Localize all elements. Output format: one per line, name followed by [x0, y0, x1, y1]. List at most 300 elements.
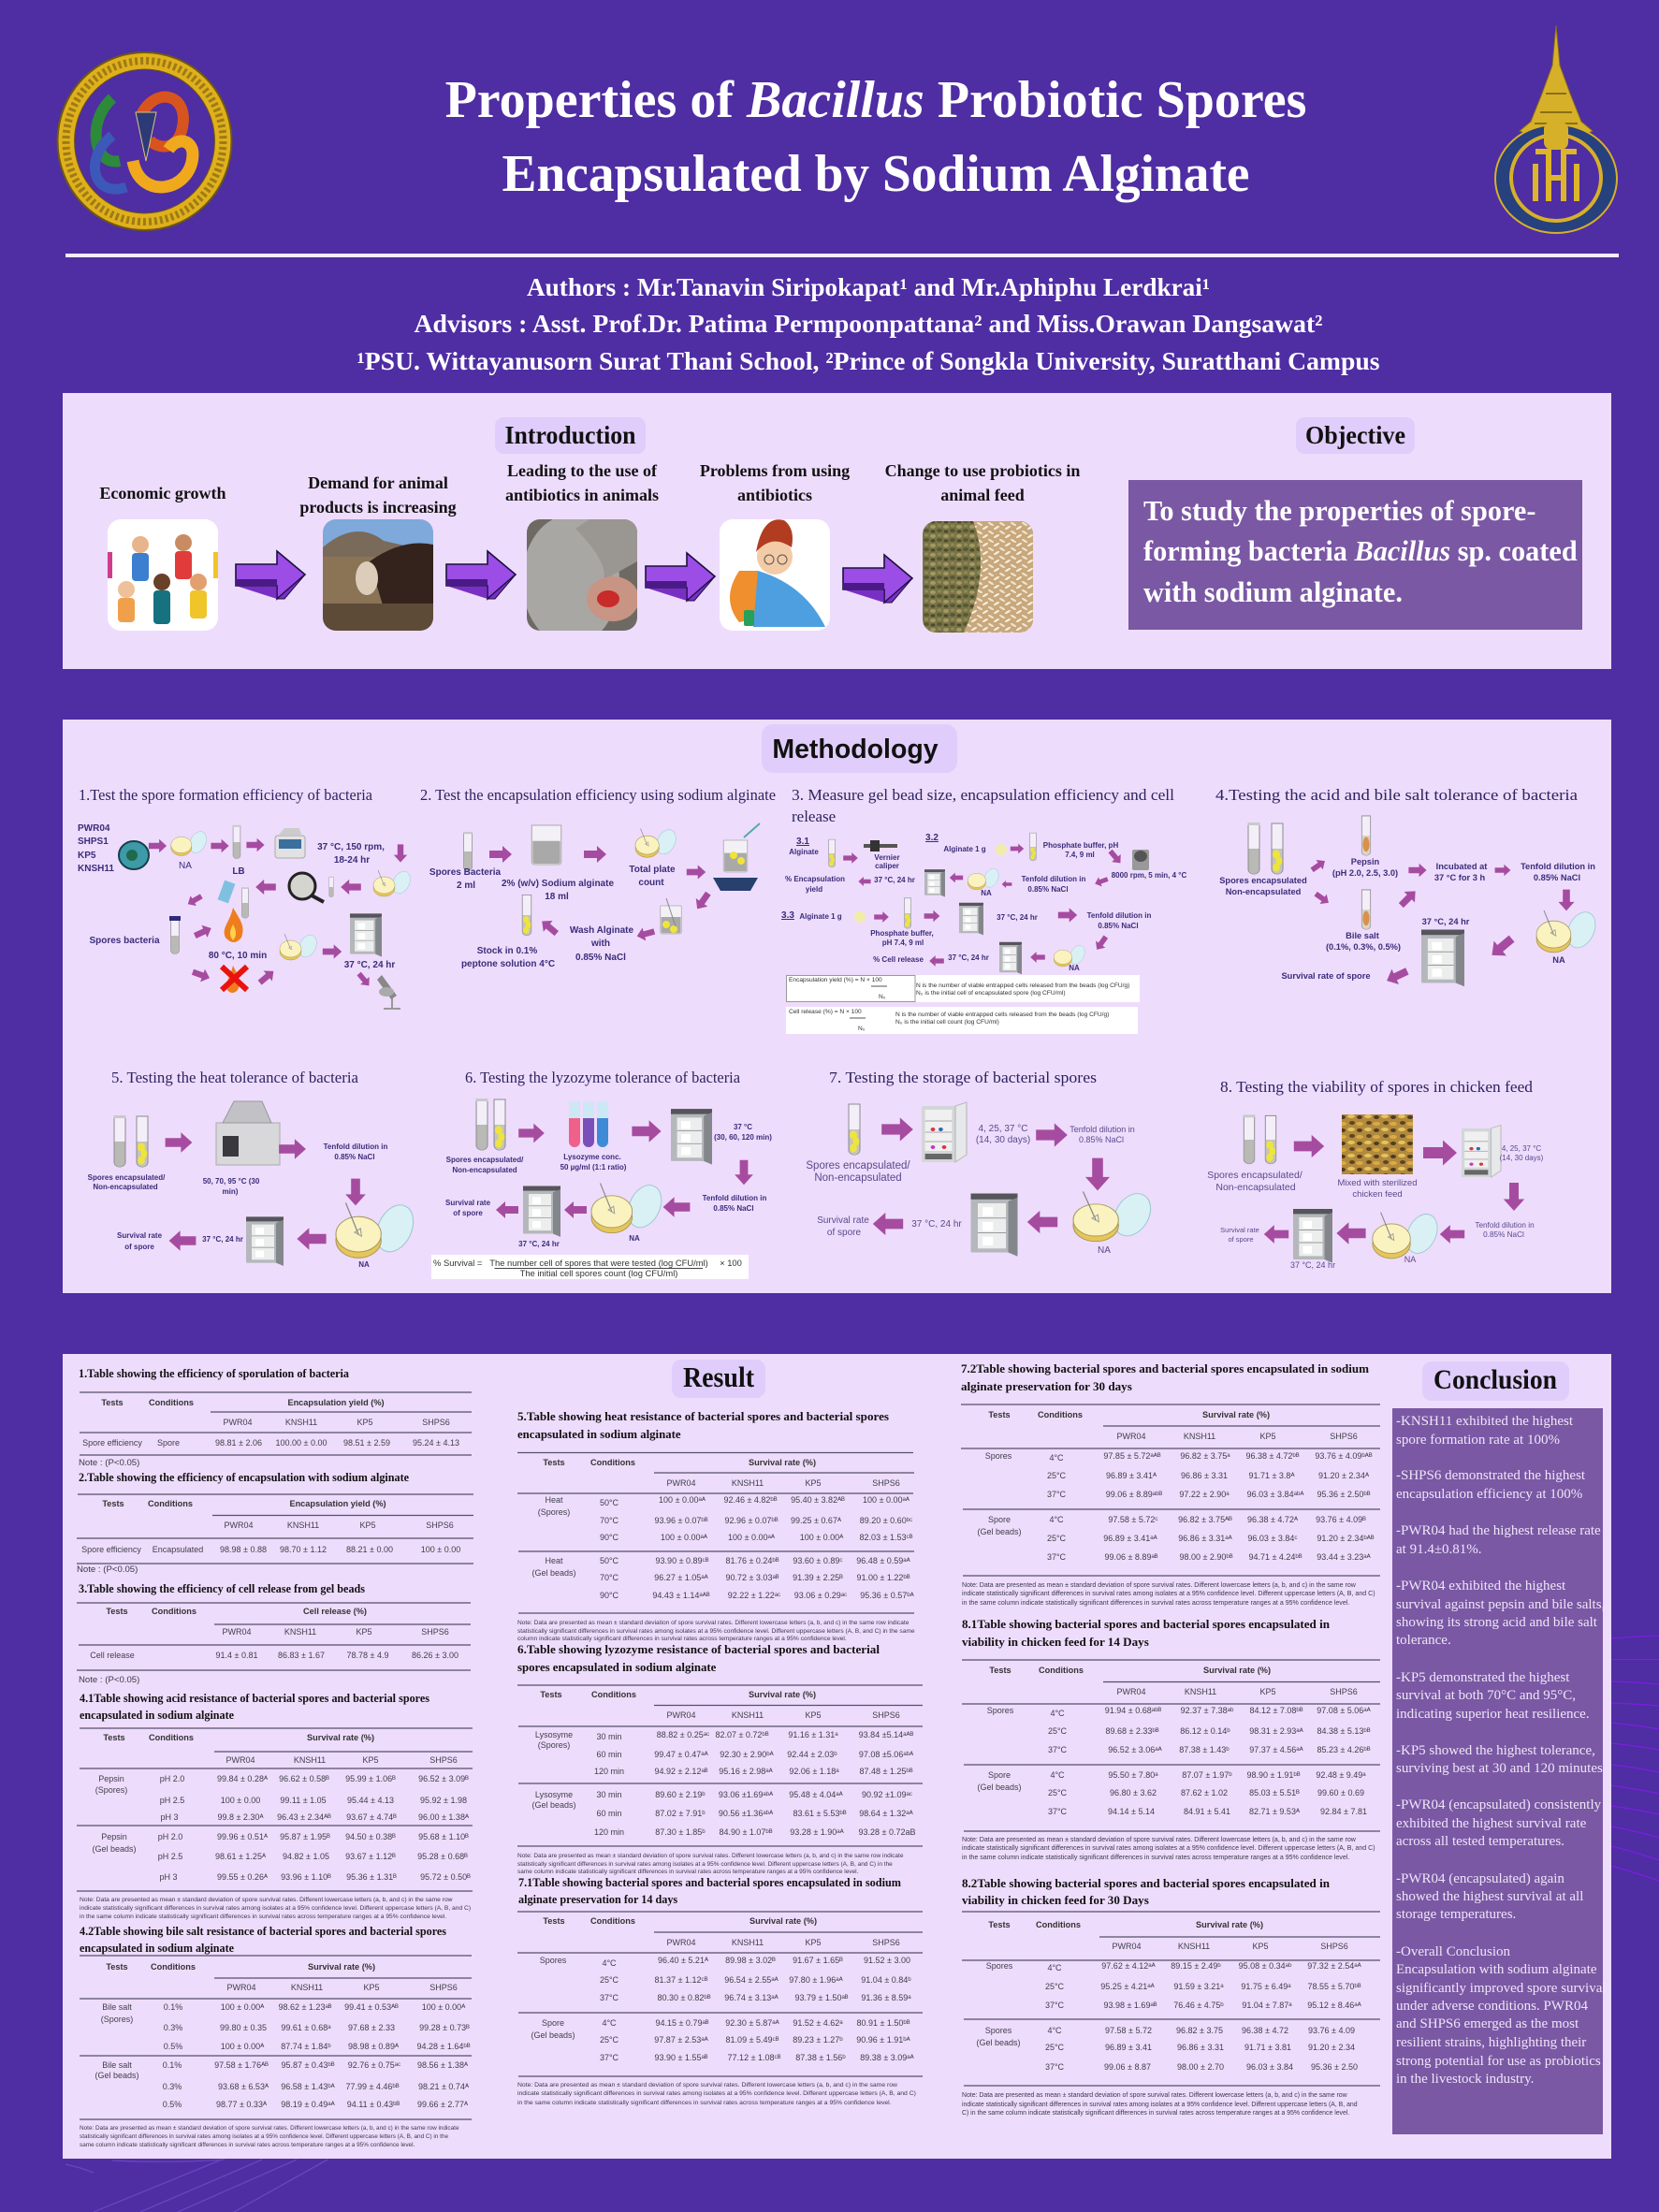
- table 8.1: chicken feed 14 days: 25°C: [1048, 1788, 1068, 1797]
- table 7.2: preservation 30 days: 96.86 ± 3.31: [1181, 1471, 1228, 1480]
- table 4.2: bile salt resistance: 0.1%: [163, 2060, 182, 2070]
- table 7.2: preservation 30 days: 93.44 ± 3.23ᵃᴬ: [1317, 1552, 1372, 1562]
- conclusion box: -PWR04 (encapsulated) consistently: [1396, 1797, 1602, 1812]
- table 5: heat resistance: (Spores): [538, 1507, 570, 1517]
- table 3: cell release: 86.83 ± 1.67: [278, 1651, 325, 1660]
- table 4.1: acid resistance: (Gel beads): [92, 1844, 137, 1854]
- diagram 8: viability in chicken feed: 0.85% NaCl: [1483, 1230, 1524, 1239]
- table 6: lysozyme resistance: PWR04: [666, 1710, 696, 1720]
- conclusion box: under adverse conditions. PWR04: [1396, 1999, 1588, 2014]
- table 4.2: bile salt resistance: 98.56 ± 1.38ᴬ: [417, 2060, 469, 2070]
- table 4.1: acid resistance: 95.28 ± 0.68ᴮ: [417, 1852, 468, 1861]
- table 4.2: bile salt resistance: encapsulated in sodium alginate: [80, 1942, 235, 1955]
- diagram 4: acid and bile salt: Non-encapsulated: [1226, 887, 1302, 896]
- table 4.2: bile salt resistance: 98.77 ± 0.33ᴬ: [216, 2100, 268, 2109]
- diagram 6: lysozyme tolerance: Spores encapsulated/: [446, 1156, 524, 1164]
- table 4.1: acid resistance: 95.72 ± 0.50ᴮ: [420, 1872, 471, 1882]
- diagram 3: gel bead size, encapsulation yield, cell release: 37 °C, 24 hr: [948, 953, 989, 962]
- table 7.1: preservation 14 days: SHPS6: [872, 1938, 900, 1947]
- diagram 1: spore formation: 18-24 hr: [334, 855, 370, 866]
- table 7.2: preservation 30 days: 4°C: [1049, 1453, 1064, 1463]
- table 6: lysozyme resistance: KNSH11: [732, 1710, 764, 1720]
- table 4.1: acid resistance: pH 2.5: [158, 1852, 182, 1861]
- diagram 3: gel bead size, encapsulation yield, cell release: 8000 rpm, 5 min, 4 °C: [1112, 871, 1186, 880]
- table 3: cell release: 86.26 ± 3.00: [412, 1651, 458, 1660]
- table 7.1: preservation 14 days: 96.54 ± 2.55ᵃᴬ: [724, 1975, 779, 1985]
- table 3: cell release: Cell release: [90, 1651, 135, 1660]
- table 4.1: acid resistance: Conditions: [149, 1733, 194, 1742]
- table 8.1: chicken feed 14 days: 95.50 ± 7.80ᵃ: [1108, 1770, 1158, 1780]
- table 7.2: preservation 30 days: 96.82 ± 3.75ᴬᴮ: [1178, 1515, 1232, 1524]
- table 7.2: preservation 30 days: KP5: [1259, 1432, 1276, 1441]
- table 6: lysozyme resistance: (Spores): [538, 1740, 570, 1750]
- table 8.2: chicken feed 30 days: 95.12 ± 8.46ᵃᴬ: [1307, 2001, 1362, 2010]
- table 6: lysozyme resistance: 88.82 ± 0.25ᵃᶜ: [657, 1730, 709, 1739]
- objective box: To study the properties of spore-: [1143, 495, 1535, 527]
- diagram 8: viability in chicken feed: NA: [1404, 1255, 1416, 1264]
- table 7.2: preservation 30 days: Note: Data are presented as mean ± standard deviation of spore survival rates. Different lowercase letters (a, b, and c) in the same row: [962, 1582, 1357, 1589]
- table 4.2: bile salt resistance: 100 ± 0.00ᴬ: [221, 2042, 265, 2051]
- diagram 3: gel bead size, encapsulation yield, cell release: % Cell release: [873, 955, 924, 964]
- table 7.1: preservation 14 days: 91.36 ± 8.59ᵃ: [861, 1993, 911, 2002]
- table 8.2: chicken feed 30 days: Tests: [988, 1920, 1011, 1929]
- table 8.1: chicken feed 14 days: 84.91 ± 5.41: [1184, 1807, 1230, 1816]
- table 8.2: chicken feed 30 days: 91.75 ± 6.49ᵃ: [1241, 1982, 1291, 1991]
- formula: percent survival: [431, 1255, 749, 1279]
- authors: [357, 273, 1379, 375]
- diagram 4: acid and bile salt: Incubated at: [1436, 862, 1487, 871]
- table 2: encapsulation: 2.Table showing the efficiency of encapsulation with sodium alginate: [79, 1471, 409, 1484]
- table 4.1: acid resistance: 4.1Table showing acid resistance of bacterial spores and bacterial spores: [80, 1692, 429, 1705]
- table 7.1: preservation 14 days: 97.80 ± 1.96ᵃᴬ: [789, 1975, 844, 1985]
- table 7.2: preservation 30 days: 37°C: [1047, 1552, 1067, 1562]
- diagram 3: gel bead size, encapsulation yield, cell release: Vernier: [874, 853, 900, 862]
- table 4.1: acid resistance: 99.55 ± 0.26ᴬ: [217, 1872, 269, 1882]
- image: people: [108, 519, 218, 631]
- table 4.2: bile salt resistance: 0.5%: [164, 2042, 182, 2051]
- diagram 1: spore formation: LB: [232, 866, 245, 877]
- table 8.1: chicken feed 14 days: (Gel beads): [977, 1783, 1022, 1792]
- method headings: [79, 786, 1578, 1096]
- table 7.1: preservation 14 days: Spores: [540, 1956, 567, 1965]
- table 5: heat resistance: KP5: [805, 1478, 822, 1488]
- diagram 3: gel bead size, encapsulation yield, cell release: caliper: [875, 862, 899, 870]
- diagram 1: spore formation: SHPS1: [78, 837, 109, 847]
- diagram 4: acid and bile salt: [1219, 816, 1601, 988]
- method headings: 6. Testing the lyzozyme tolerance of bacteria: [465, 1069, 740, 1086]
- table 8.2: chicken feed 30 days: viability in chicken feed for 30 Days: [962, 1893, 1149, 1907]
- table 8.1: chicken feed 14 days: 4°C: [1050, 1709, 1065, 1718]
- table 4.2: bile salt resistance: 99.61 ± 0.68ᵃ: [281, 2023, 331, 2032]
- table 4.2: bile salt resistance: 0.1%: [164, 2002, 182, 2012]
- table 5: heat resistance: column indicate statistically significant differences in survival rates across temperature ranges at a 95% confidence level.: [517, 1636, 847, 1642]
- image: sheep wound: [527, 519, 637, 631]
- step labels: [99, 461, 1080, 517]
- conclusion box: Encapsulation with sodium alginate: [1396, 1962, 1597, 1977]
- table 4.1: acid resistance: Pepsin: [101, 1832, 127, 1841]
- diagram 5: heat tolerance: 0.85% NaCl: [334, 1153, 375, 1161]
- table 8.1: chicken feed 14 days: 85.23 ± 4.26ᵇᴮ: [1317, 1745, 1371, 1754]
- formula: cell release: N is the number of viable entrapped cells released from the beads (log CFU/g): [895, 1011, 1109, 1018]
- table 4.2: bile salt resistance: Survival rate (%): [308, 1962, 375, 1972]
- diagram 3: gel bead size, encapsulation yield, cell release: yield: [806, 885, 822, 894]
- table 7.2: preservation 30 days: KNSH11: [1184, 1432, 1215, 1441]
- table 5: heat resistance: 50°C: [600, 1556, 619, 1565]
- table 5: heat resistance: 70°C: [600, 1573, 619, 1582]
- conclusion box: across all tested temperatures.: [1396, 1834, 1564, 1849]
- table 7.1: preservation 14 days: Conditions: [590, 1916, 635, 1926]
- conclusion box: -Overall Conclusion: [1396, 1944, 1511, 1959]
- diagram 2: encapsulation: Stock in 0.1%: [477, 946, 537, 956]
- table 7.2: preservation 30 days: 93.76 ± 4.09ᵇᴬᴮ: [1315, 1451, 1373, 1461]
- table 6: lysozyme resistance: Conditions: [591, 1690, 636, 1699]
- table 6: lysozyme resistance: 95.48 ± 4.04ᵃᴬ: [789, 1790, 844, 1799]
- table 6: lysozyme resistance: 30 min: [596, 1790, 622, 1799]
- table 6: lysozyme resistance: 30 min: [596, 1732, 622, 1741]
- table 1: sporulation: Spore: [157, 1438, 180, 1448]
- table 4.2: bile salt resistance: KP5: [363, 1983, 380, 1992]
- table 2: encapsulation: 100 ± 0.00: [421, 1545, 460, 1554]
- table 7.1: preservation 14 days: 37°C: [600, 2053, 619, 2062]
- table 8.2: chicken feed 30 days: KNSH11: [1178, 1942, 1210, 1951]
- heading: objective: [1296, 417, 1415, 454]
- conclusion box: surviving best at 30 and 120 minutes.: [1396, 1761, 1607, 1776]
- formula: percent survival: % Survival =: [433, 1258, 483, 1268]
- diagram 8: viability in chicken feed: of spore: [1228, 1235, 1254, 1244]
- diagram 3: gel bead size, encapsulation yield, cell release: 3.1: [796, 837, 809, 847]
- diagram 3: gel bead size, encapsulation yield, cell release: 7.4, 9 ml: [1065, 851, 1095, 859]
- diagram 5: heat tolerance: 37 °C, 24 hr: [202, 1235, 243, 1244]
- table 7.1: preservation 14 days: Survival rate (%): [749, 1916, 817, 1926]
- logo: school seal: [58, 52, 232, 230]
- table 4.2: bile salt resistance: 100 ± 0.00ᴬ: [422, 2002, 466, 2012]
- table 8.1: chicken feed 14 days: Spores: [987, 1706, 1014, 1715]
- table 4.1: acid resistance: 96.62 ± 0.58ᴮ: [279, 1774, 329, 1783]
- method headings: release: [792, 808, 836, 825]
- conclusion box: -PWR04 (encapsulated) again: [1396, 1871, 1564, 1886]
- table 5: heat resistance: 95.40 ± 3.82ᴬᴮ: [791, 1495, 845, 1505]
- diagram 2: encapsulation: 0.85% NaCl: [575, 953, 626, 963]
- table 7.2: preservation 30 days: 97.22 ± 2.90ᵃ: [1179, 1490, 1230, 1499]
- table 1: sporulation: 95.24 ± 4.13: [413, 1438, 459, 1448]
- table 4.1: acid resistance: 99.11 ± 1.05: [280, 1796, 327, 1805]
- diagram 3: gel bead size, encapsulation yield, cell release: 37 °C, 24 hr: [997, 913, 1038, 922]
- table 4.2: bile salt resistance: 98.98 ± 0.89ᴬ: [348, 2042, 400, 2051]
- table 8.2: chicken feed 30 days: 99.06 ± 8.87: [1104, 2062, 1151, 2072]
- table 4.1: acid resistance: Note: Data are presented as mean ± standard deviation of spore survival rates. Different lowercase letters (a, b, and c) in the same row: [80, 1897, 453, 1903]
- formula: encapsulation yield: N is the number of viable entrapped cells released from the beads (log CFU/g): [916, 982, 1129, 989]
- diagram 1: spore formation: 80 °C, 10 min: [209, 951, 267, 961]
- table 6: lysozyme resistance: 91.16 ± 1.31ᵃ: [788, 1730, 838, 1739]
- table 8.2: chicken feed 30 days: 4°C: [1047, 2026, 1062, 2035]
- table 3: cell release: 91.4 ± 0.81: [216, 1651, 257, 1660]
- table 7.2: preservation 30 days: Spores: [985, 1451, 1012, 1461]
- table 8.1: chicken feed 14 days: 82.71 ± 9.53ᴬ: [1249, 1807, 1301, 1816]
- table 5: heat resistance: 90°C: [600, 1533, 619, 1542]
- table 5: heat resistance: Heat: [545, 1556, 563, 1565]
- table 8.1: chicken feed 14 days: 84.38 ± 5.13ᵇᴮ: [1317, 1726, 1371, 1736]
- title: [445, 71, 1306, 203]
- table 3: cell release: 3.Table showing the efficiency of cell release from gel beads: [79, 1582, 365, 1595]
- table 6: lysozyme resistance: same column indicate statistically significant differences in survival rates across temperature ranges at a 95% confidence level.: [517, 1869, 859, 1875]
- table 6: lysozyme resistance: 98.64 ± 1.32ᵃᴬ: [859, 1809, 914, 1818]
- diagram 3: gel bead size, encapsulation yield, cell release: 3.3: [781, 910, 794, 921]
- table 8.1: chicken feed 14 days: 86.12 ± 0.14ᵇ: [1180, 1726, 1230, 1736]
- table 4.1: acid resistance: 98.61 ± 1.25ᴬ: [215, 1852, 267, 1861]
- table 8.2: chicken feed 30 days: 97.32 ± 2.54ᵃᴬ: [1307, 1961, 1362, 1971]
- table 5: heat resistance: 99.25 ± 0.67ᴬ: [791, 1516, 842, 1525]
- table 8.2: chicken feed 30 days: SHPS6: [1320, 1942, 1348, 1951]
- panel: methodology: [63, 720, 1611, 1293]
- table 7.1: preservation 14 days: 91.52 ± 4.62ᵃ: [793, 2018, 843, 2028]
- table 7.1: preservation 14 days: Note: Data are presented as mean ± standard deviation of spore survival rates. Different lowercase letters (a, b, and c) in the same row: [517, 2082, 897, 2088]
- table 4.1: acid resistance: 99.84 ± 0.28ᴬ: [217, 1774, 269, 1783]
- table 4.2: bile salt resistance: PWR04: [226, 1983, 256, 1992]
- table 4.1: acid resistance: indicate statistically significant differences in survival rates among isolates at a 95% confidence level. Different uppercase letters (A, B, and C): [80, 1905, 471, 1912]
- diagram 2: encapsulation: Spores Bacteria: [429, 867, 502, 878]
- conclusion box: -KP5 showed the highest tolerance,: [1396, 1743, 1595, 1758]
- table 8.2: chicken feed 30 days: 91.04 ± 7.87ᵃ: [1242, 2001, 1292, 2010]
- table 5: heat resistance: 100 ± 0.00ᵃᴬ: [863, 1495, 910, 1505]
- conclusion box: indicating superior heat resilience.: [1396, 1707, 1590, 1722]
- formula: cell release: [786, 1007, 1138, 1034]
- table 2: encapsulation: Tests: [102, 1499, 124, 1508]
- table 7.1: preservation 14 days: alginate preservation for 14 days: [518, 1893, 677, 1906]
- table 5: heat resistance: 93.96 ± 0.07ᵇᴮ: [654, 1516, 708, 1525]
- table 2: encapsulation: Conditions: [148, 1499, 193, 1508]
- table 4.2: bile salt resistance: 0.3%: [164, 2023, 182, 2032]
- table 8.2: chicken feed 30 days: 91.71 ± 3.81: [1244, 2043, 1291, 2052]
- diagram 7: storage: Tenfold dilution in: [1070, 1125, 1135, 1134]
- table 4.2: bile salt resistance: Bile salt: [102, 2002, 132, 2012]
- method headings: 2. Test the encapsulation efficiency using sodium alginate: [420, 786, 776, 804]
- table 3: cell release: Cell release (%): [303, 1607, 367, 1616]
- diagram 5: heat tolerance: [88, 1101, 420, 1269]
- table 5: heat resistance: 100 ± 0.00ᵃᴬ: [728, 1533, 776, 1542]
- table 8.1: chicken feed 14 days: 91.94 ± 0.68ᵃᵇᴮ: [1105, 1706, 1161, 1715]
- table 4.2: bile salt resistance: 99.28 ± 0.73ᴮ: [419, 2023, 470, 2032]
- table 4.2: bile salt resistance: 100 ± 0.00ᴬ: [221, 2002, 265, 2012]
- divider: [65, 254, 1619, 257]
- table 4.1: acid resistance: KNSH11: [294, 1755, 326, 1765]
- table 5: heat resistance: Tests: [543, 1458, 565, 1467]
- table 8.2: chicken feed 30 days: 76.46 ± 4.75ᵇ: [1173, 2001, 1224, 2010]
- table 5: heat resistance: 90°C: [600, 1591, 619, 1600]
- method headings: 1.Test the spore formation efficiency of bacteria: [79, 786, 372, 804]
- table 6: lysozyme resistance: statistically significant differences in survival rates among isolates at a 95% confidence level. Different uppercase letters (A, B, and C) in the: [517, 1861, 893, 1868]
- table 6: lysozyme resistance: 95.16 ± 2.98ᵃᴬ: [719, 1767, 774, 1776]
- table 7.1: preservation 14 days: 89.23 ± 1.27ᵇ: [793, 2035, 843, 2045]
- table 2: encapsulation: Encapsulation yield (%): [289, 1499, 386, 1508]
- table 7.2: preservation 30 days: alginate preservation for 30 days: [961, 1379, 1132, 1393]
- conclusion box: showed the highest survival at all: [1396, 1889, 1583, 1904]
- conclusion box: spore formation rate at 100%: [1396, 1433, 1560, 1448]
- table 8.2: chicken feed 30 days: 97.62 ± 4.12ᵃᴬ: [1101, 1961, 1157, 1971]
- table 7.1: preservation 14 days: 77.12 ± 1.08ᶜᴮ: [728, 2053, 781, 2062]
- diagram 4: acid and bile salt: NA: [1552, 955, 1565, 965]
- table 8.1: chicken feed 14 days: Survival rate (%): [1203, 1666, 1271, 1675]
- table 4.2: bile salt resistance: Note: Data are presented as mean ± standard deviation of spore survival rates. Different lowercase letters (a, b, and c) in the same row indicate: [80, 2125, 459, 2132]
- table 4.1: acid resistance: 93.96 ± 1.10ᴮ: [281, 1872, 331, 1882]
- diagram 5: heat tolerance: Survival rate: [117, 1231, 163, 1240]
- table 7.2: preservation 30 days: 96.38 ± 4.72ᴬ: [1247, 1515, 1299, 1524]
- heading: methodology: [762, 724, 957, 773]
- conclusion box: -KP5 demonstrated the highest: [1396, 1670, 1570, 1685]
- diagram 6: lysozyme tolerance: 37 °C, 24 hr: [518, 1240, 560, 1248]
- table 2: encapsulation: PWR04: [224, 1521, 254, 1530]
- table 6: lysozyme resistance: 99.47 ± 0.47ᵃᴬ: [654, 1750, 709, 1759]
- table 7.1: preservation 14 days: KP5: [805, 1938, 822, 1947]
- table 4.1: acid resistance: pH 2.5: [160, 1796, 184, 1805]
- diagram 8: viability in chicken feed: [1207, 1114, 1544, 1270]
- image: animal feed grains: [923, 521, 1033, 633]
- diagram 8: viability in chicken feed: 4, 25, 37 °C: [1502, 1144, 1541, 1153]
- conclusion box: significantly improved spore survival: [1396, 1981, 1607, 1996]
- table 5: heat resistance: Conditions: [590, 1458, 635, 1467]
- diagram 5: heat tolerance: of spore: [124, 1243, 154, 1251]
- table 8.1: chicken feed 14 days: 84.12 ± 7.08ᵇᴮ: [1249, 1706, 1303, 1715]
- table 4.1: acid resistance: 93.67 ± 1.12ᴮ: [345, 1852, 396, 1861]
- diagram 8: viability in chicken feed: 37 °C, 24 hr: [1290, 1260, 1335, 1270]
- diagram 7: storage: 4, 25, 37 °C: [979, 1124, 1027, 1134]
- table 7.1: preservation 14 days: 96.40 ± 5.21ᴬ: [658, 1956, 709, 1965]
- table 7.2: preservation 30 days: in the same column indicate statistically significant differences in survival rates across temperature ranges at a 95% confidence level.: [962, 1600, 1349, 1607]
- table 6: lysozyme resistance: Lysosyme: [535, 1790, 573, 1799]
- table 4.1: acid resistance: pH 2.0: [160, 1774, 184, 1783]
- table 6: lysozyme resistance: 93.84 ±5.14ᵃᴬᴮ: [859, 1730, 914, 1739]
- table 4.1: acid resistance: 99.8 ± 2.30ᴬ: [217, 1812, 264, 1822]
- objective box: [1128, 480, 1582, 630]
- diagram 4: acid and bile salt: 0.85% NaCl: [1534, 873, 1580, 882]
- conclusion box: -PWR04 had the highest release rate: [1396, 1523, 1601, 1538]
- table 6: lysozyme resistance: 93.28 ± 0.72aB: [859, 1827, 915, 1837]
- step labels: Change to use probiotics in: [885, 461, 1080, 480]
- table 6: lysozyme resistance: 120 min: [594, 1827, 624, 1837]
- table 3: cell release: PWR04: [222, 1627, 252, 1637]
- table 7.2: preservation 30 days: (Gel beads): [977, 1527, 1022, 1536]
- table 7.1: preservation 14 days: 87.38 ± 1.56ᵇ: [795, 2053, 846, 2062]
- table 4.1: acid resistance: [77, 1692, 473, 1920]
- table 4.1: acid resistance: PWR04: [226, 1755, 255, 1765]
- table 8.2: chicken feed 30 days: 95.36 ± 2.50: [1311, 2062, 1358, 2072]
- diagram 5: heat tolerance: Spores encapsulated/: [88, 1173, 166, 1182]
- diagram 4: acid and bile salt: (pH 2.0, 2.5, 3.0): [1332, 868, 1398, 878]
- table 8.1: chicken feed 14 days: 97.08 ± 5.06ᵃᴬ: [1317, 1706, 1372, 1715]
- authors: Advisors : Asst. Prof.Dr. Patima Permpoonpattana² and Miss.Orawan Dangsawat²: [414, 310, 1323, 338]
- table 7.2: preservation 30 days: 25°C: [1047, 1471, 1067, 1480]
- table 7.2: preservation 30 days: 96.89 ± 3.41ᵃᴬ: [1103, 1534, 1158, 1543]
- diagram 2: encapsulation: 2% (w/v) Sodium alginate: [502, 879, 614, 889]
- table 4.2: bile salt resistance: Bile salt: [102, 2060, 132, 2070]
- diagram 1: spore formation: NA: [179, 861, 192, 871]
- table 1: sporulation: 98.51 ± 2.59: [343, 1438, 390, 1448]
- diagram 1: spore formation: 37 °C, 150 rpm,: [317, 842, 385, 852]
- table 6: lysozyme resistance: KP5: [805, 1710, 822, 1720]
- table 8.2: chicken feed 30 days: 4°C: [1047, 1963, 1062, 1972]
- diagram 6: lysozyme tolerance: Tenfold dilution in: [703, 1194, 766, 1202]
- table 5: heat resistance: 100 ± 0.00ᵃᴬ: [659, 1495, 706, 1505]
- table 6: lysozyme resistance: SHPS6: [872, 1710, 900, 1720]
- table 8.1: chicken feed 14 days: Tests: [989, 1666, 1011, 1675]
- formula: cell release: N₀ is the initial cell count (log CFU/ml): [895, 1019, 999, 1026]
- table 8.1: chicken feed 14 days: [962, 1618, 1380, 1861]
- formula: encapsulation yield: [786, 975, 1140, 1002]
- table 8.2: chicken feed 30 days: Spores: [986, 1961, 1013, 1971]
- diagram 3: gel bead size, encapsulation yield, cell release: 37 °C, 24 hr: [874, 876, 915, 884]
- conclusion box: survival at both 70°C and 95°C,: [1396, 1688, 1576, 1703]
- table 6: lysozyme resistance: 92.44 ± 2.03ᵇ: [787, 1750, 837, 1759]
- table 7.2: preservation 30 days: 97.58 ± 5.72ᶜ: [1108, 1515, 1158, 1524]
- table 4.2: bile salt resistance: Tests: [106, 1962, 128, 1972]
- table 8.1: chicken feed 14 days: 8.1Table showing bacterial spores and bacterial spores encapsulated in: [962, 1618, 1330, 1631]
- table 7.2: preservation 30 days: Tests: [988, 1410, 1011, 1419]
- table 8.2: chicken feed 30 days: 89.15 ± 2.49ᵇ: [1171, 1961, 1221, 1971]
- table 8.1: chicken feed 14 days: 25°C: [1048, 1726, 1068, 1736]
- table 7.2: preservation 30 days: 25°C: [1047, 1534, 1067, 1543]
- table 4.1: acid resistance: 95.99 ± 1.06ᴮ: [345, 1774, 396, 1783]
- table 8.2: chicken feed 30 days: 25°C: [1045, 1982, 1065, 1991]
- formula: cell release: Cell release (%) = N × 100: [789, 1009, 862, 1015]
- diagram 1: spore formation: KNSH11: [78, 864, 114, 874]
- diagram 1: spore formation: Spores bacteria: [89, 936, 160, 946]
- table 1: sporulation: Spore efficiency: [82, 1438, 142, 1448]
- diagram 3: gel bead size, encapsulation yield, cell release: % Encapsulation: [785, 875, 845, 883]
- table 7.1: preservation 14 days: 93.79 ± 1.50ᵃᴮ: [794, 1993, 849, 2002]
- table 8.1: chicken feed 14 days: 87.07 ± 1.97ᵇ: [1182, 1770, 1232, 1780]
- diagram 6: lysozyme tolerance: 50 µg/ml (1:1 ratio): [560, 1163, 627, 1171]
- table 5: heat resistance: 5.Table showing heat resistance of bacterial spores and bacterial spores: [517, 1410, 889, 1423]
- diagram 8: viability in chicken feed: (14, 30 days): [1500, 1154, 1544, 1162]
- diagram 4: acid and bile salt: (0.1%, 0.3%, 0.5%): [1326, 942, 1401, 952]
- conclusion box: in the livestock industry.: [1396, 2072, 1534, 2087]
- diagram 5: heat tolerance: min): [223, 1187, 239, 1196]
- table 4.2: bile salt resistance: (Gel beads): [95, 2071, 139, 2080]
- table 2: encapsulation: [77, 1471, 473, 1575]
- table 5: heat resistance: 82.03 ± 1.53ᶜᴮ: [860, 1533, 913, 1542]
- table 7.1: preservation 14 days: 92.30 ± 5.87ᵃᴬ: [725, 2018, 780, 2028]
- step labels: antibiotics: [737, 486, 812, 504]
- diagram 8: viability in chicken feed: Mixed with sterilized: [1338, 1178, 1417, 1188]
- table 4.1: acid resistance: 95.44 ± 4.13: [347, 1796, 394, 1805]
- table 7.1: preservation 14 days: 80.30 ± 0.82ᵇᴮ: [657, 1993, 711, 2002]
- diagram 4: acid and bile salt: Bile salt: [1346, 931, 1379, 940]
- table 8.1: chicken feed 14 days: Conditions: [1039, 1666, 1084, 1675]
- table 4.1: acid resistance: in the same column indicate statistically significant differences in survival rates across temperature ranges at a 95% confidence level.: [80, 1914, 446, 1920]
- diagram 3: gel bead size, encapsulation yield, cell release: pH 7.4, 9 ml: [882, 939, 924, 947]
- diagram 5: heat tolerance: NA: [358, 1260, 370, 1269]
- table 2: encapsulation: KP5: [359, 1521, 376, 1530]
- table 7.2: preservation 30 days: 95.36 ± 2.50ᵇᴮ: [1317, 1490, 1371, 1499]
- table 4.2: bile salt resistance: 4.2Table showing bile salt resistance of bacterial spores and bacterial spores: [80, 1925, 446, 1938]
- table 7.2: preservation 30 days: 96.03 ± 3.84ᶜ: [1247, 1534, 1298, 1543]
- table 8.2: chicken feed 30 days: (Gel beads): [976, 2038, 1021, 2047]
- formula: percent survival: × 100: [720, 1258, 742, 1268]
- diagram 7: storage: Non-encapsulated: [814, 1172, 902, 1184]
- diagram 4: acid and bile salt: 37 °C for 3 h: [1434, 873, 1485, 882]
- table 5: heat resistance: 70°C: [600, 1516, 619, 1525]
- table 4.1: acid resistance: 100 ± 0.00: [221, 1796, 260, 1805]
- diagram 4: acid and bile salt: Tenfold dilution in: [1521, 862, 1595, 871]
- table 4.2: bile salt resistance: 77.99 ± 4.46ᵇᴮ: [345, 2082, 400, 2091]
- table 2: encapsulation: 88.21 ± 0.00: [346, 1545, 393, 1554]
- table 8.1: chicken feed 14 days: 92.48 ± 9.49ᵃ: [1316, 1770, 1366, 1780]
- table 7.2: preservation 30 days: 91.71 ± 3.8ᴬ: [1248, 1471, 1295, 1480]
- table 7.1: preservation 14 days: KNSH11: [732, 1938, 764, 1947]
- table 4.2: bile salt resistance: 94.11 ± 0.43ᵇᴮ: [347, 2100, 400, 2109]
- table 4.1: acid resistance: Tests: [103, 1733, 125, 1742]
- table 5: heat resistance: 91.39 ± 2.25ᴮ: [793, 1573, 843, 1582]
- table 5: heat resistance: 92.96 ± 0.07ᵇᴮ: [724, 1516, 779, 1525]
